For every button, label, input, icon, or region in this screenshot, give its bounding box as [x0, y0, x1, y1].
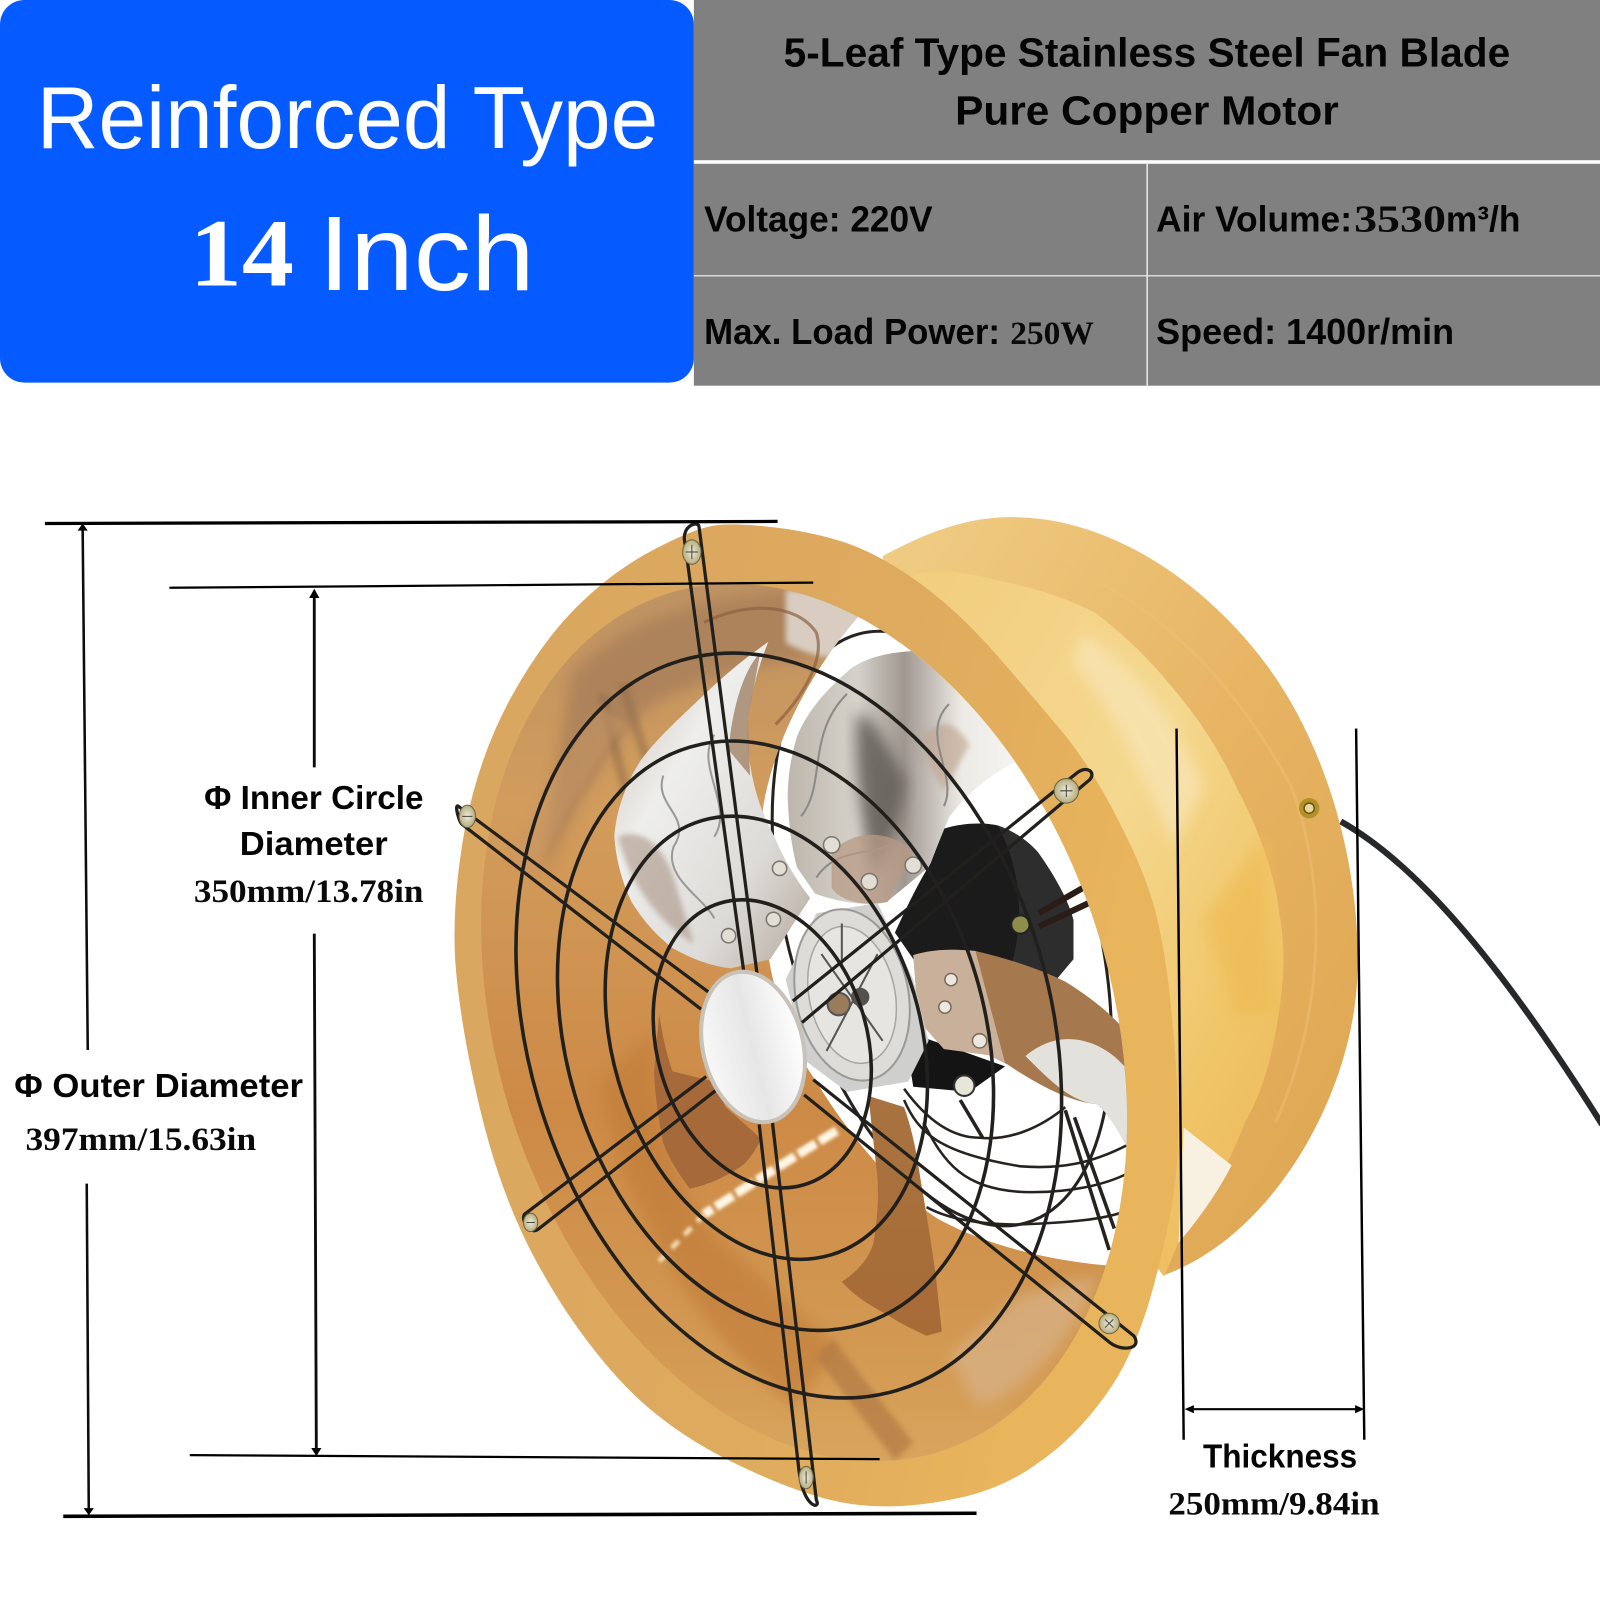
center hub cap: [686, 961, 820, 1133]
flange lip line: [1031, 556, 1316, 1122]
motor: [895, 823, 1089, 1096]
title: 14 Inch: Inch: [318, 195, 535, 313]
spec: max load power: 250W: [1010, 316, 1094, 352]
spec: air volume: Air Volume:: [1156, 200, 1352, 240]
motor hub plate: [779, 898, 929, 1092]
title: 14 Inch: [190, 195, 535, 313]
front guard rings: [430, 586, 1147, 1465]
label: inner circle diameter: Diameter: [240, 826, 388, 863]
label: thickness: 250mm/9.84in: [1168, 1486, 1380, 1522]
dimension: thickness: [1168, 729, 1380, 1522]
fan blade: right: [913, 950, 1133, 1158]
spec: speed: Speed: 1400r/min: [1156, 312, 1454, 352]
arrowheads: [309, 589, 321, 1456]
label: inner circle diameter: Φ Inner Circle: [204, 780, 423, 817]
heading: blade and motor: 5-Leaf Type Stainless Steel Fan Blade: [784, 29, 1510, 75]
dimension: inner circle diameter: [169, 583, 880, 1459]
fan blade: bottom: [842, 1096, 942, 1336]
fan blade: upper left: [614, 642, 810, 968]
heading: blade and motor: [784, 29, 1510, 133]
guard screws: [459, 540, 1119, 1489]
label: outer diameter: Φ Outer Diameter: [14, 1068, 303, 1105]
arrowheads: [1185, 1405, 1364, 1413]
front ring: [455, 524, 1178, 1506]
panel: blue title badge: [0, 0, 694, 383]
rear flange: [883, 517, 1358, 1276]
spec: air volume: m³/h: [1446, 200, 1520, 240]
heading: blade and motor: Pure Copper Motor: [955, 87, 1339, 133]
fan interior inside ring: [481, 584, 1128, 1461]
label: inner circle diameter: [194, 780, 423, 910]
label: thickness: Thickness: [1203, 1438, 1357, 1475]
dimension: outer diameter: [14, 521, 977, 1516]
label: inner circle diameter: 350mm/13.78in: [194, 874, 423, 910]
fan blade: upper right: [788, 651, 1020, 904]
interior reflections: [520, 587, 1097, 1460]
power cable: [1341, 821, 1600, 1124]
rear flange bolt: [1299, 798, 1319, 818]
panel: specification table: [694, 0, 1600, 386]
duct body: [908, 571, 1283, 1277]
front guard spokes: [457, 524, 1136, 1505]
spec: voltage: Voltage: 220V: [704, 200, 933, 240]
arrowheads: [78, 523, 94, 1515]
rear opening white: [761, 602, 1153, 1265]
duct interior wall: [481, 584, 1126, 1461]
spec: air volume: [1156, 199, 1520, 241]
fan product illustration: [430, 510, 1600, 1510]
spec: max load power: Max. Load Power:: [704, 312, 1000, 352]
spec: air volume: 3530: [1354, 199, 1446, 241]
title: Reinforced Type: Reinforced Type: [37, 69, 658, 167]
duct highlight reflections: [1071, 633, 1276, 1243]
rear guard wires: [770, 630, 1126, 1250]
label: outer diameter: [14, 1068, 303, 1158]
fan blade: lower left: [654, 1014, 761, 1189]
label: outer diameter: 397mm/15.63in: [26, 1122, 256, 1158]
title: 14 Inch: 14: [190, 201, 294, 307]
label: thickness: [1168, 1438, 1380, 1522]
